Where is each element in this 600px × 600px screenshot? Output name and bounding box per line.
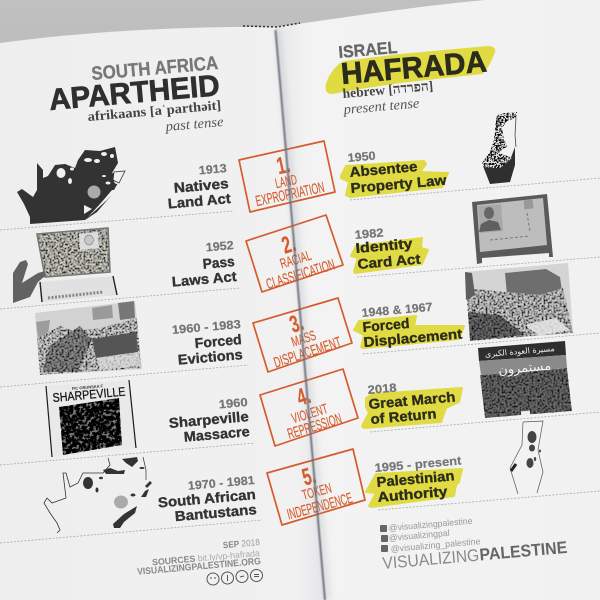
heading: Israel hafrada — [327, 38, 494, 118]
heading: South Africa apartheid: SOUTH AFRICA — [91, 53, 219, 85]
stamp 3: mass displacement: MASS — [289, 327, 318, 350]
heading: Israel hafrada: hebrew [הפרדה] — [342, 78, 434, 101]
photo: demolished homes — [465, 263, 573, 341]
heading: South Africa apartheid: afrikaans [aˈparthəit] — [87, 97, 222, 124]
panel: right book page — [276, 0, 600, 600]
left column: events: Bantustans — [174, 501, 257, 524]
right column: events: 1995 - present — [374, 453, 462, 475]
map: South Africa land act — [17, 147, 125, 224]
right column: events: 2018 — [367, 380, 397, 397]
left column: events: 1960 — [218, 395, 249, 412]
left column: events: Pass — [202, 253, 235, 272]
highlighted right column events — [341, 161, 464, 507]
right column: events: 1950 — [347, 149, 376, 165]
poster: Great March of Return: مستمرون — [498, 359, 552, 378]
stamp 2: racial classification — [246, 215, 343, 293]
stamp 4: violent repression — [260, 369, 358, 446]
stamp 1: land expropriation: LAND — [274, 171, 298, 191]
stamp 1: land expropriation: EXPROPRIATION — [254, 179, 326, 210]
credits: sources: SEP 2018 — [222, 537, 260, 550]
right column: events: 1948 & 1967 — [361, 300, 433, 320]
stamp 5: token independence — [267, 449, 365, 525]
stamp 2: racial classification: RACIAL — [278, 247, 313, 272]
social handles — [380, 516, 481, 554]
row dividers — [0, 178, 600, 543]
poster: Great March of Return — [478, 341, 572, 418]
heading: Israel hafrada: HAFRADA — [340, 45, 488, 91]
left column: events: Sharpeville — [168, 408, 249, 431]
left column: events: 1960 - 1983 — [171, 317, 242, 337]
logo: Visualizing Palestine: VISUALIZING — [382, 546, 480, 573]
credits: sources: SOURCES bit.ly/vp-hafrada — [152, 548, 260, 567]
heading: South Africa apartheid: APARTHEID — [48, 69, 221, 117]
right column: events: Card Act — [357, 251, 421, 272]
poster: Sharpeville: FIC ORUNSKA F — [72, 383, 104, 391]
right column: events: of Return — [370, 405, 437, 427]
logo: Visualizing Palestine — [382, 538, 568, 573]
highlight: Great March of Return — [362, 388, 462, 428]
right column: events: Property Law — [350, 172, 447, 196]
stamp 4: violent repression: 4. — [294, 382, 314, 412]
photo: passbook in hand — [13, 228, 117, 303]
map: South African Bantustans — [44, 457, 152, 533]
map: Palestine absentee land — [482, 112, 517, 184]
stamp 1: land expropriation: 1. — [274, 151, 293, 180]
social handles: @visualizing_palestine — [390, 536, 481, 554]
social handles: @visualizingpal — [388, 528, 450, 543]
poster: Sharpeville — [46, 380, 136, 457]
left column: events: Land Act — [167, 190, 232, 211]
left column: events: 1970 - 1981 — [187, 473, 256, 493]
page edge stack — [243, 23, 300, 27]
left column: events: Forced — [194, 331, 242, 351]
stamp 3: mass displacement — [253, 298, 352, 372]
poster: Sharpeville: SHARPEVILLE — [52, 385, 126, 405]
map: Palestinian Authority areas — [510, 421, 543, 494]
stamp 2: racial classification: 2. — [279, 230, 299, 260]
right column: events — [347, 149, 463, 505]
left column: events: 1952 — [205, 238, 235, 254]
highlight: Identity Card Act — [351, 238, 428, 273]
book spine — [276, 30, 328, 600]
left column: events — [157, 161, 257, 524]
stamp 5: token independence: TOKEN — [300, 480, 333, 503]
stamp 5: token independence: 5. — [299, 462, 319, 491]
left column: events: Laws Act — [171, 268, 238, 290]
stamp 1: land expropriation — [239, 141, 335, 212]
right column: events: Palestinian — [376, 467, 455, 490]
icons: creative commons — [207, 570, 262, 585]
social handles: @visualizingpalestine — [388, 516, 473, 533]
stamp 3: mass displacement: DISPLACEMENT — [272, 334, 344, 372]
heading: South Africa apartheid — [48, 53, 224, 135]
left column: events: Natives — [173, 175, 229, 196]
right column: events: Identity — [355, 235, 413, 256]
stamp 2: racial classification: CLASSIFICATION — [264, 256, 337, 293]
highlight: Absentee Property Law — [341, 161, 448, 197]
highlight: Forced Displacement — [354, 316, 464, 348]
right column: events: Absentee — [349, 158, 418, 180]
stamp 4: violent repression: REPRESSION — [285, 410, 344, 443]
left column: events: Massacre — [183, 423, 250, 445]
logo: Visualizing Palestine: PALESTINE — [479, 538, 568, 564]
left column: events: Evictions — [177, 346, 243, 368]
right column: events: Great March — [368, 388, 456, 412]
highlight: Palestinian Authority — [366, 469, 462, 507]
stamp 5: token independence: INDEPENDENCE — [285, 490, 354, 524]
poster: Great March of Return: مسيرة العودة الكبرى — [484, 344, 555, 359]
credits: sources: VISUALIZINGPALESTINE.ORG — [137, 556, 261, 578]
heading: Israel hafrada: present tense — [342, 96, 420, 118]
panel: left book page — [0, 27, 330, 600]
right column: events: 1982 — [354, 225, 384, 242]
right column: events: Forced — [362, 315, 410, 335]
stamp 3: mass displacement: 3. — [286, 309, 307, 339]
left column: events: 1913 — [198, 161, 228, 177]
left column: events: South African — [157, 486, 256, 511]
photo: identity card — [472, 194, 553, 264]
credits: sources — [137, 537, 261, 578]
photo: forced evictions — [35, 301, 142, 375]
heading: South Africa apartheid: past tense — [164, 115, 224, 135]
right column: events: Authority — [377, 483, 448, 505]
right column: events: Displacement — [363, 325, 463, 350]
heading: Israel hafrada: ISRAEL — [338, 38, 398, 62]
stamp 4: violent repression: VIOLENT — [290, 400, 330, 426]
